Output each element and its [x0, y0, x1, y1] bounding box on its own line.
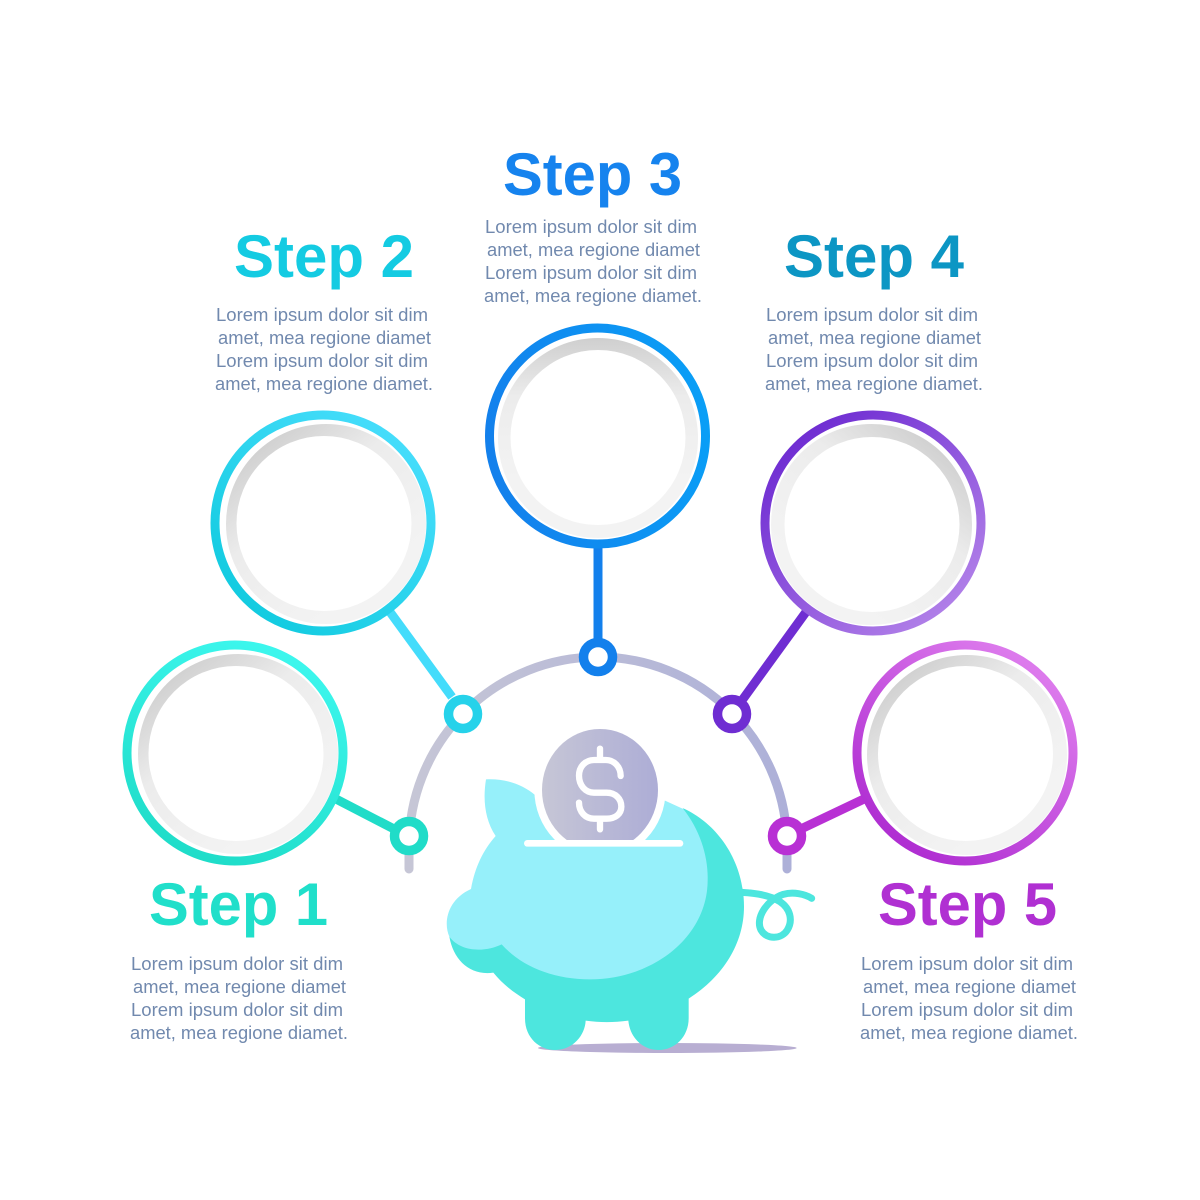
connector: step 4 [743, 612, 806, 699]
text block: step 5: amet, mea regione diamet. [860, 1023, 1078, 1043]
text block: step 3: Lorem ipsum dolor sit dim [485, 217, 697, 237]
icon: piggy bank with coin [447, 721, 812, 1053]
text block: step 4: amet, mea regione diamet. [765, 374, 983, 394]
node: step 5 [772, 822, 802, 850]
text block: step 4: Lorem ipsum dolor sit dim [766, 351, 978, 371]
text block: step 4: amet, mea regione diamet [768, 328, 981, 348]
text block: step 2: amet, mea regione diamet. [215, 374, 433, 394]
node: step 3 [584, 642, 612, 672]
text block: step 4 [765, 305, 983, 394]
pig body shade [449, 808, 744, 1050]
text block: step 5: Lorem ipsum dolor sit dim [861, 1000, 1073, 1020]
text block: step 1 [130, 954, 348, 1043]
pig tail [742, 892, 812, 937]
text block: step 1: amet, mea regione diamet. [130, 1023, 348, 1043]
ring: step 1 [127, 645, 343, 861]
coin slot halo [534, 794, 665, 840]
text block: step 2: Lorem ipsum dolor sit dim [216, 351, 428, 371]
heading: step 3: Step 3 [503, 141, 682, 208]
ring: step 4 [765, 415, 981, 631]
heading: step 2: Step 2 [234, 223, 414, 290]
pig body highlight [447, 779, 708, 979]
coin slot [527, 833, 680, 853]
text block: step 2: Lorem ipsum dolor sit dim [216, 305, 428, 325]
ring: step 2 [215, 415, 431, 631]
heading: step 1: Step 1 [149, 871, 328, 938]
text block: step 3: amet, mea regione diamet [487, 240, 700, 260]
ring: step 5 [857, 645, 1073, 861]
text block: step 3: Lorem ipsum dolor sit dim [485, 263, 697, 283]
text block: step 1: Lorem ipsum dolor sit dim [131, 954, 343, 974]
text block: step 5: amet, mea regione diamet [863, 977, 1076, 997]
text block: step 3: amet, mea regione diamet. [484, 286, 702, 306]
text block: step 3 [484, 217, 702, 306]
icon: dollar sign [579, 749, 621, 829]
text block: step 5 [860, 954, 1078, 1043]
node: step 4 [718, 700, 746, 728]
text block: step 1: Lorem ipsum dolor sit dim [131, 1000, 343, 1020]
text block: step 2 [215, 305, 433, 394]
heading: step 4: Step 4 [784, 223, 965, 290]
central arc [409, 657, 787, 869]
text block: step 5: Lorem ipsum dolor sit dim [861, 954, 1073, 974]
node: step 2 [448, 700, 478, 728]
text block: step 1: amet, mea regione diamet [133, 977, 346, 997]
node: step 1 [394, 822, 424, 850]
coin [542, 729, 658, 851]
heading: step 5: Step 5 [878, 871, 1057, 938]
pig shadow [538, 1043, 797, 1053]
connector: step 2 [390, 612, 452, 697]
connector: step 5 [803, 799, 864, 828]
ring: step 3 [490, 328, 706, 544]
text block: step 4: Lorem ipsum dolor sit dim [766, 305, 978, 325]
connector: step 3 [594, 545, 602, 642]
connector: step 1 [336, 799, 396, 830]
text block: step 2: amet, mea regione diamet [218, 328, 431, 348]
